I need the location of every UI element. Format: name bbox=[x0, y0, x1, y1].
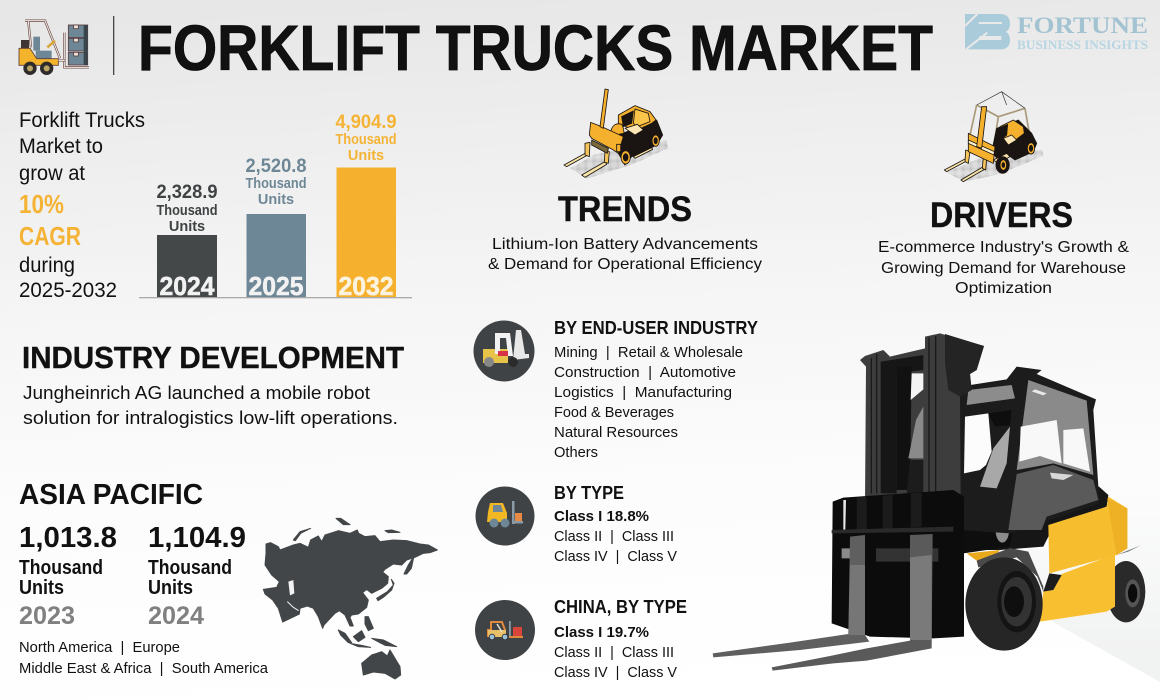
panel: Asia Pacific stats: ASIA PACIFIC bbox=[19, 479, 203, 511]
logo: Fortune Business Insights: BUSINESS INSIGHTS bbox=[1017, 37, 1148, 52]
header icon: forklift with boxes bbox=[19, 21, 89, 75]
panel: China by type: Class II | Class III bbox=[554, 644, 674, 661]
bar 2025 bbox=[246, 156, 306, 301]
panel: by type: Class II | Class III bbox=[554, 528, 674, 545]
cab lower frame bbox=[963, 477, 1108, 553]
stat 2023: Thousand bbox=[19, 557, 103, 579]
map: Asia Pacific bbox=[263, 518, 437, 679]
bar 2025: 2,520.8 bbox=[246, 156, 306, 177]
panel: China by type bbox=[554, 597, 687, 681]
bar 2024: 2024 bbox=[160, 271, 215, 301]
logo: Fortune Business Insights bbox=[965, 13, 1148, 52]
panel: by end-user industry: Food & Beverages bbox=[554, 404, 674, 421]
bar 2032: Units bbox=[348, 148, 384, 164]
panel: industry development: Jungheinrich AG launched a mobile robot bbox=[23, 383, 370, 403]
stat 2023: Units bbox=[19, 577, 64, 599]
stat 2024: 1,104.9 bbox=[148, 522, 246, 554]
text block: drivers description: Optimization bbox=[955, 280, 1052, 297]
text block: trends description: Lithium-Ion Battery Advancements bbox=[492, 236, 758, 253]
bar 2024: Units bbox=[169, 219, 205, 235]
panel: by end-user industry: Others bbox=[554, 444, 598, 461]
text block: drivers description: E-commerce Industry's Growth & bbox=[878, 239, 1129, 256]
stat 2024 bbox=[148, 522, 246, 630]
text block: market growth statement: Forklift Trucks bbox=[19, 108, 145, 132]
bar 2032 bbox=[336, 112, 396, 301]
rear wheel bbox=[1107, 561, 1145, 622]
icon: isometric forklift with cage (drivers) bbox=[944, 92, 1043, 182]
text block: market growth statement: 2025-2032 bbox=[19, 278, 117, 302]
panel: by type bbox=[554, 483, 677, 565]
heading: drivers: DRIVERS bbox=[930, 196, 1073, 235]
text block: market growth statement bbox=[19, 108, 145, 302]
panel: by type: Class I 18.8% bbox=[554, 508, 649, 525]
bar 2025: 2025 bbox=[248, 271, 304, 301]
text block: market growth statement: during bbox=[19, 253, 75, 277]
logo: Fortune Business Insights: FORTUNE bbox=[1017, 13, 1148, 38]
title: FORKLIFT TRUCKS MARKET bbox=[138, 12, 933, 84]
text block: market growth statement: grow at bbox=[19, 161, 85, 185]
bar 2032: Thousand bbox=[336, 132, 396, 148]
icon: type forklift in circle bbox=[476, 486, 534, 546]
icon: china forklift in circle bbox=[475, 600, 535, 660]
mast bbox=[860, 333, 984, 503]
other regions: North America | Europe bbox=[19, 640, 180, 656]
panel: by end-user industry: Construction | Automotive bbox=[554, 364, 736, 381]
panel: by type: BY TYPE bbox=[554, 483, 624, 503]
panel: industry development: INDUSTRY DEVELOPMENT bbox=[22, 340, 404, 375]
bar 2024: 2,328.9 bbox=[156, 182, 218, 203]
bar 2024: Thousand bbox=[156, 203, 218, 219]
panel: by end-user industry: Logistics | Manufacturing bbox=[554, 384, 732, 401]
bar chart: market size bbox=[139, 112, 412, 301]
other regions bbox=[19, 640, 269, 677]
panel: China by type: CHINA, BY TYPE bbox=[554, 597, 687, 617]
text block: drivers description bbox=[878, 239, 1129, 297]
panel: industry development: solution for intralogistics low-lift operations. bbox=[23, 408, 398, 428]
panel: Asia Pacific stats bbox=[19, 479, 269, 677]
front wheel bbox=[965, 557, 1043, 651]
stat 2023: 1,013.8 bbox=[19, 522, 117, 554]
stat 2024: Thousand bbox=[148, 557, 232, 579]
text block: market growth statement: Market to bbox=[19, 134, 103, 158]
panel: by end-user industry: BY END-USER INDUSTRY bbox=[554, 318, 758, 338]
text block: trends description bbox=[488, 236, 762, 273]
stat 2023 bbox=[19, 522, 117, 630]
forks bbox=[713, 534, 933, 671]
icon: end-user forklift in circle bbox=[474, 320, 534, 382]
panel: China by type: Class I 19.7% bbox=[554, 624, 649, 641]
other regions: Middle East & Africa | South America bbox=[19, 661, 269, 677]
panel: by end-user industry: Natural Resources bbox=[554, 424, 678, 441]
bar 2032: 2032 bbox=[338, 271, 394, 301]
panel: China by type: Class IV | Class V bbox=[554, 664, 677, 681]
carriage and fork backrest bbox=[832, 490, 964, 638]
stat 2024: 2024 bbox=[148, 602, 204, 630]
text block: drivers description: Growing Demand for Warehouse bbox=[881, 260, 1126, 277]
cab upper with windows bbox=[960, 367, 1099, 533]
heading: trends: TRENDS bbox=[558, 190, 692, 229]
text block: market growth statement: 10% bbox=[19, 189, 64, 219]
bar 2032: 4,904.9 bbox=[336, 112, 396, 133]
illustration: large yellow forklift bbox=[713, 333, 1145, 671]
header divider bbox=[113, 16, 114, 75]
text block: market growth statement: CAGR bbox=[19, 221, 81, 251]
stat 2024: Units bbox=[148, 577, 193, 599]
bar 2024 bbox=[156, 182, 218, 301]
icon: isometric forklift (trends) bbox=[564, 89, 668, 178]
panel: by type: Class IV | Class V bbox=[554, 548, 677, 565]
panel: by end-user industry bbox=[554, 318, 758, 461]
bar 2025: Thousand bbox=[246, 176, 306, 192]
bar 2025: Units bbox=[258, 192, 294, 208]
panel: by end-user industry: Mining | Retail & Wholesale bbox=[554, 344, 743, 361]
panel: industry development bbox=[22, 340, 404, 428]
yellow body bbox=[967, 497, 1141, 622]
text block: trends description: & Demand for Operational Efficiency bbox=[488, 256, 762, 273]
stat 2023: 2023 bbox=[19, 602, 75, 630]
